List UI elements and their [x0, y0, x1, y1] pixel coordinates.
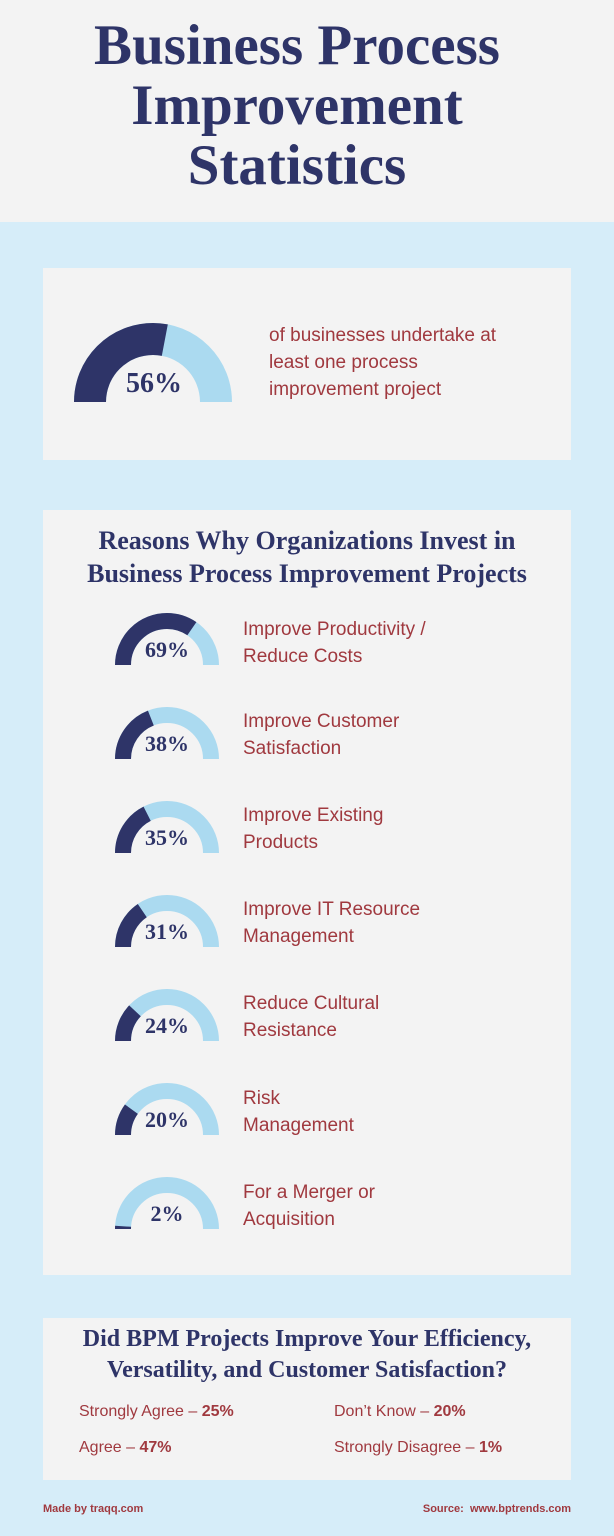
- label 69: Improve Productivity /: [243, 619, 426, 640]
- label 2: [243, 1182, 375, 1230]
- gauge 24: [123, 997, 211, 1041]
- panel: survey: Strongly Disagree – 1%: [334, 1439, 502, 1456]
- label 31: [243, 899, 420, 947]
- stat text: of businesses undertake at: [269, 325, 496, 346]
- title: [94, 14, 500, 197]
- label 24: Resistance: [243, 1020, 337, 1041]
- label 2: For a Merger or: [243, 1182, 375, 1203]
- panel: reasons: [43, 510, 571, 1275]
- label 20: [243, 1088, 354, 1136]
- survey heading: [83, 1326, 531, 1383]
- label 35: Products: [243, 832, 318, 853]
- footer credit: Made by traqq.com: [43, 1503, 143, 1515]
- label 38: Satisfaction: [243, 738, 341, 759]
- panel: 56% stat: [43, 268, 571, 460]
- gauge 24: 24%: [145, 1013, 189, 1038]
- label 38: [243, 711, 399, 759]
- footer source: Source: www.bptrends.com: [423, 1503, 571, 1515]
- reasons heading: Reasons Why Organizations Invest in: [98, 526, 516, 555]
- gauge 35: [123, 809, 211, 853]
- gauge 69: [123, 621, 211, 665]
- top background: [0, 0, 614, 222]
- panel: survey: Agree – 47%: [79, 1439, 172, 1456]
- label 31: Management: [243, 926, 354, 947]
- label 20: Management: [243, 1115, 354, 1136]
- label 2: Acquisition: [243, 1209, 335, 1230]
- label 69: Reduce Costs: [243, 646, 362, 667]
- stat text: least one process: [269, 352, 418, 373]
- reasons heading: Business Process Improvement Projects: [87, 559, 527, 588]
- survey results: [79, 1403, 502, 1456]
- reasons heading: [87, 526, 527, 588]
- label 20: Risk: [243, 1088, 280, 1109]
- panel: survey: [43, 1318, 571, 1480]
- stat text: improvement project: [269, 379, 441, 400]
- label 24: [243, 993, 379, 1041]
- label 38: Improve Customer: [243, 711, 399, 732]
- label 35: [243, 805, 383, 853]
- gauge 20: 20%: [145, 1107, 189, 1132]
- title: Statistics: [188, 134, 406, 197]
- gauge 2: 2%: [150, 1201, 184, 1226]
- gauge 56%: 56%: [126, 368, 182, 399]
- gauge 35: 35%: [145, 825, 189, 850]
- label 35: Improve Existing: [243, 805, 383, 826]
- title: Improvement: [131, 74, 463, 137]
- gauge 2: [123, 1185, 211, 1229]
- gauge 31: 31%: [145, 919, 189, 944]
- label 31: Improve IT Resource: [243, 899, 420, 920]
- label 24: Reduce Cultural: [243, 993, 379, 1014]
- gauge 31: [123, 903, 211, 947]
- stat text: [269, 325, 496, 400]
- gauge 69: 69%: [145, 637, 189, 662]
- survey heading: Versatility, and Customer Satisfaction?: [107, 1357, 507, 1383]
- survey heading: Did BPM Projects Improve Your Efficiency,: [83, 1326, 531, 1352]
- gauge 38: 38%: [145, 731, 189, 756]
- panel: survey: Don’t Know – 20%: [334, 1403, 466, 1420]
- gauge 38: [123, 715, 211, 759]
- gauge 20: [123, 1091, 211, 1135]
- gauge 56%: [74, 323, 232, 402]
- panel: survey: Strongly Agree – 25%: [79, 1403, 234, 1420]
- title: Business Process: [94, 14, 500, 77]
- label 69: [243, 619, 426, 667]
